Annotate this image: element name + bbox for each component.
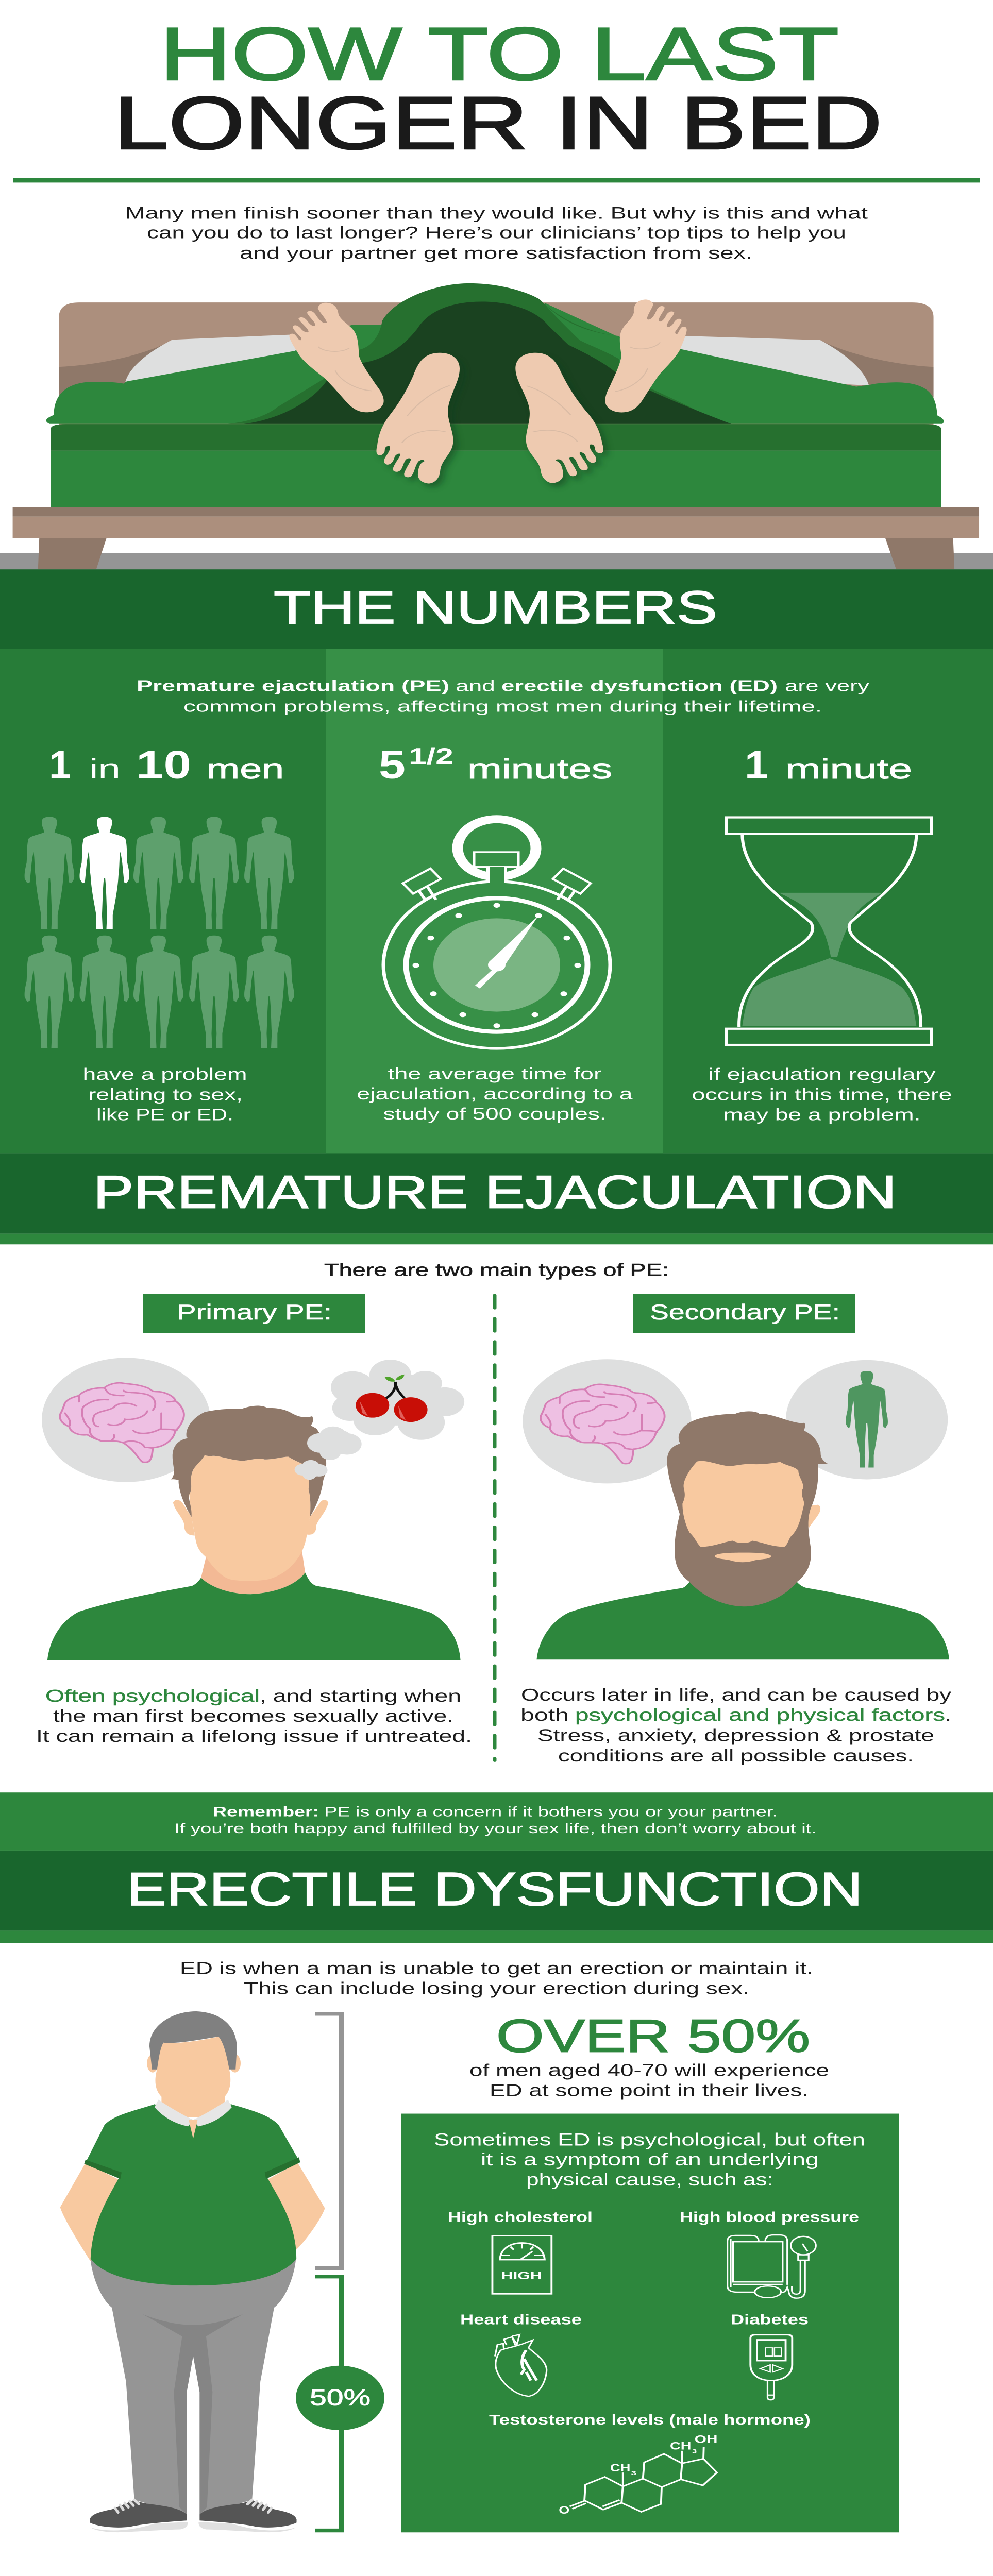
- caption: average time: [357, 1064, 633, 1123]
- numbers intro text: [137, 677, 870, 715]
- illustration: bed with feet under blanket: [13, 283, 979, 569]
- cause labels: Testosterone levels (male hormone): [489, 2412, 811, 2428]
- callout: remember: [0, 1792, 993, 1851]
- description: secondary PE: Stress, anxiety, depression & prostate: [537, 1726, 934, 1745]
- stat: 1 minute: 1: [745, 743, 768, 787]
- caption: have a problem: relating to sex,: [88, 1086, 243, 1104]
- mattress: [51, 424, 941, 507]
- description: secondary PE: [520, 1686, 951, 1765]
- stat: 5 1/2 minutes: minutes: [467, 753, 612, 785]
- stat: 1 in 10 men: 10: [136, 743, 191, 787]
- neck and ears: [147, 2054, 241, 2117]
- description: primary PE: , and starting when: [260, 1687, 461, 1706]
- ear: [807, 1505, 820, 1528]
- icon: testosterone molecule: CH: [670, 2440, 691, 2452]
- hair: [171, 1406, 326, 1517]
- caption: average time: the average time for: [388, 1064, 602, 1083]
- intro text: and your partner get more satisfaction from sex.: [240, 244, 752, 262]
- icon grid: ten men, one highlighted: [25, 817, 294, 1048]
- heading band: premature ejaculation: PREMATURE EJACULATION: [93, 1166, 897, 1218]
- stat: 1 in 10 men: men: [207, 753, 284, 785]
- badge: 50%: [296, 2366, 384, 2430]
- cause labels: High cholesterol: [448, 2209, 593, 2225]
- stat: over 50%: of men aged 40-70 will experience: [469, 2061, 829, 2080]
- numbers intro text: common problems, affecting most men during their lifetime.: [183, 698, 822, 715]
- ED definition text: This can include losing your erection during sex.: [244, 1979, 749, 1998]
- numbers intro text: and: [456, 677, 495, 694]
- face: [682, 1461, 804, 1547]
- headboard: [59, 302, 934, 430]
- callout: remember: PE is only a concern if it bothers you or your partner.: [324, 1804, 778, 1820]
- illustration: primary PE man: [42, 1358, 464, 1660]
- callout: remember: Remember:: [213, 1804, 319, 1820]
- panel: the numbers background columns: [0, 649, 993, 1153]
- stat: 1 minute: minute: [785, 753, 912, 785]
- cause labels: Diabetes: [731, 2312, 809, 2328]
- icon: testosterone molecule: OH: [695, 2433, 717, 2445]
- icon: testosterone molecule: CH: [610, 2462, 630, 2474]
- description: primary PE: Often psychological: [45, 1687, 260, 1706]
- stat: 5 1/2 minutes: 1/2: [409, 744, 453, 769]
- caption: regular ejaculation: may be a problem.: [723, 1106, 920, 1124]
- stat: 5 1/2 minutes: 5: [379, 743, 406, 787]
- cause labels: Heart disease: [460, 2312, 582, 2328]
- icon: testosterone molecule: 3: [692, 2448, 697, 2454]
- panel intro text: physical cause, such as:: [526, 2170, 773, 2189]
- label: secondary PE: [633, 1294, 855, 1333]
- description: secondary PE: conditions are all possible causes.: [558, 1746, 914, 1765]
- raised feet: [289, 296, 701, 414]
- heading band: erectile dysfunction: [0, 1851, 993, 1943]
- caption: regular ejaculation: [692, 1065, 952, 1124]
- callout: remember: If you’re both happy and fulfilled by your sex life, then don’t worry about it.: [174, 1821, 817, 1836]
- stat: 5 1/2 minutes: [379, 743, 612, 787]
- numbers intro text: are very: [785, 677, 870, 694]
- caption: regular ejaculation: occurs in this time, there: [692, 1086, 952, 1104]
- numbers intro text: Premature ejactulation (PE): [137, 677, 449, 694]
- stat: over 50%: ED at some point in their lives.: [490, 2081, 809, 2100]
- description: primary PE: the man first becomes sexually active.: [53, 1707, 453, 1726]
- description: secondary PE: both: [520, 1706, 569, 1725]
- title: [114, 12, 882, 165]
- title: HOW TO LAST: [160, 12, 839, 96]
- hair and beard: [667, 1411, 828, 1606]
- hanging feet: [376, 351, 605, 484]
- stat: 1 in 10 men: [49, 743, 284, 787]
- thought bubble: brain: [523, 1359, 692, 1483]
- shirt: [84, 2104, 300, 2285]
- intro text: can you do to last longer? Here’s our clinicians’ top tips to help you: [147, 224, 846, 242]
- trousers: [91, 2259, 296, 2514]
- small thought clouds: [295, 1427, 362, 1480]
- panel intro text: Sometimes ED is psychological, but often: [434, 2129, 865, 2149]
- icon: cholesterol card: [492, 2235, 551, 2294]
- bracket: upper 50 percent: [315, 2014, 341, 2268]
- stat: over 50%: [469, 2010, 829, 2100]
- subheading: two types: There are two main types of PE:: [324, 1260, 669, 1280]
- illustration: secondary PE man: [523, 1359, 949, 1659]
- description: primary PE: It can remain a lifelong issue if untreated.: [36, 1727, 472, 1746]
- label: primary PE: [143, 1294, 365, 1333]
- icon: testosterone molecule: O: [559, 2504, 569, 2516]
- description: secondary PE: Occurs later in life, and can be caused by: [521, 1686, 951, 1704]
- face: [189, 1455, 310, 1581]
- floor band: [0, 553, 993, 570]
- intro text: Many men finish sooner than they would like. But why is this and what: [125, 204, 868, 223]
- icon: hourglass: [727, 818, 932, 1045]
- collar: [155, 2099, 232, 2139]
- description: secondary PE: .: [945, 1706, 951, 1725]
- cause labels: [448, 2209, 859, 2428]
- pillows: [125, 334, 869, 385]
- head and hair: [149, 2011, 237, 2103]
- shirt: [536, 1582, 949, 1659]
- foot shadows: [380, 354, 609, 488]
- badge: 50%: 50%: [310, 2385, 371, 2411]
- panel: physical causes: [401, 2114, 899, 2532]
- numbers intro text: erectile dysfunction (ED): [501, 677, 778, 694]
- panel intro text: it is a symptom of an underlying: [481, 2149, 819, 2169]
- arms: [60, 2163, 325, 2261]
- stat: over 50%: OVER 50%: [496, 2010, 810, 2062]
- label: primary PE: Primary PE:: [177, 1300, 332, 1324]
- description: secondary PE: psychological and physical factors: [575, 1706, 945, 1725]
- heading band: erectile dysfunction: ERECTILE DYSFUNCTION: [127, 1863, 863, 1916]
- caption: average time: ejaculation, according to a: [357, 1084, 633, 1103]
- panel intro text: [434, 2129, 865, 2189]
- ED definition text: [180, 1959, 813, 1998]
- icon: testosterone molecule: 3: [631, 2470, 636, 2476]
- cause labels: High blood pressure: [680, 2209, 859, 2225]
- title: LONGER IN BED: [114, 81, 882, 165]
- icon: testosterone molecule: [559, 2433, 717, 2516]
- caption: have a problem: have a problem: [82, 1065, 247, 1084]
- label: secondary PE: Secondary PE:: [650, 1300, 840, 1324]
- illustration: overweight man: [60, 2011, 325, 2532]
- caption: regular ejaculation: if ejaculation regulary: [708, 1065, 936, 1084]
- caption: have a problem: [82, 1065, 247, 1124]
- icon: heart: [495, 2334, 547, 2396]
- bed frame: [13, 507, 979, 569]
- stat: 1 in 10 men: 1: [49, 743, 71, 787]
- caption: have a problem: like PE or ED.: [96, 1106, 233, 1124]
- icon: blood pressure monitor: [728, 2235, 816, 2298]
- neck shadow: [201, 1550, 305, 1594]
- blanket hump: [228, 283, 731, 424]
- caption: average time: study of 500 couples.: [383, 1105, 606, 1123]
- thought bubble: brain: [42, 1358, 210, 1482]
- description: primary PE: [36, 1687, 472, 1746]
- stat: 1 in 10 men: in: [89, 753, 121, 785]
- stat: 1 minute: [745, 743, 912, 787]
- mouth: [715, 1553, 771, 1562]
- icon: cholesterol card: HIGH: [501, 2270, 542, 2282]
- thought bubble: cherries: [331, 1360, 464, 1440]
- icon: glucose meter: [750, 2335, 792, 2400]
- heading band: the numbers: THE NUMBERS: [274, 581, 717, 633]
- bracket: lower 50 percent: [315, 2277, 341, 2531]
- shirt: [47, 1572, 461, 1660]
- intro text: [125, 204, 868, 262]
- ears: [173, 1500, 328, 1535]
- blanket sides: [46, 303, 944, 424]
- heading band: the numbers: [0, 569, 993, 649]
- icon: stopwatch: [383, 819, 610, 1048]
- shoes: [90, 2500, 297, 2532]
- thought bubble: body: [786, 1360, 948, 1479]
- ED definition text: ED is when a man is unable to get an erection or maintain it.: [180, 1959, 813, 1978]
- heading band: premature ejaculation: [0, 1153, 993, 1244]
